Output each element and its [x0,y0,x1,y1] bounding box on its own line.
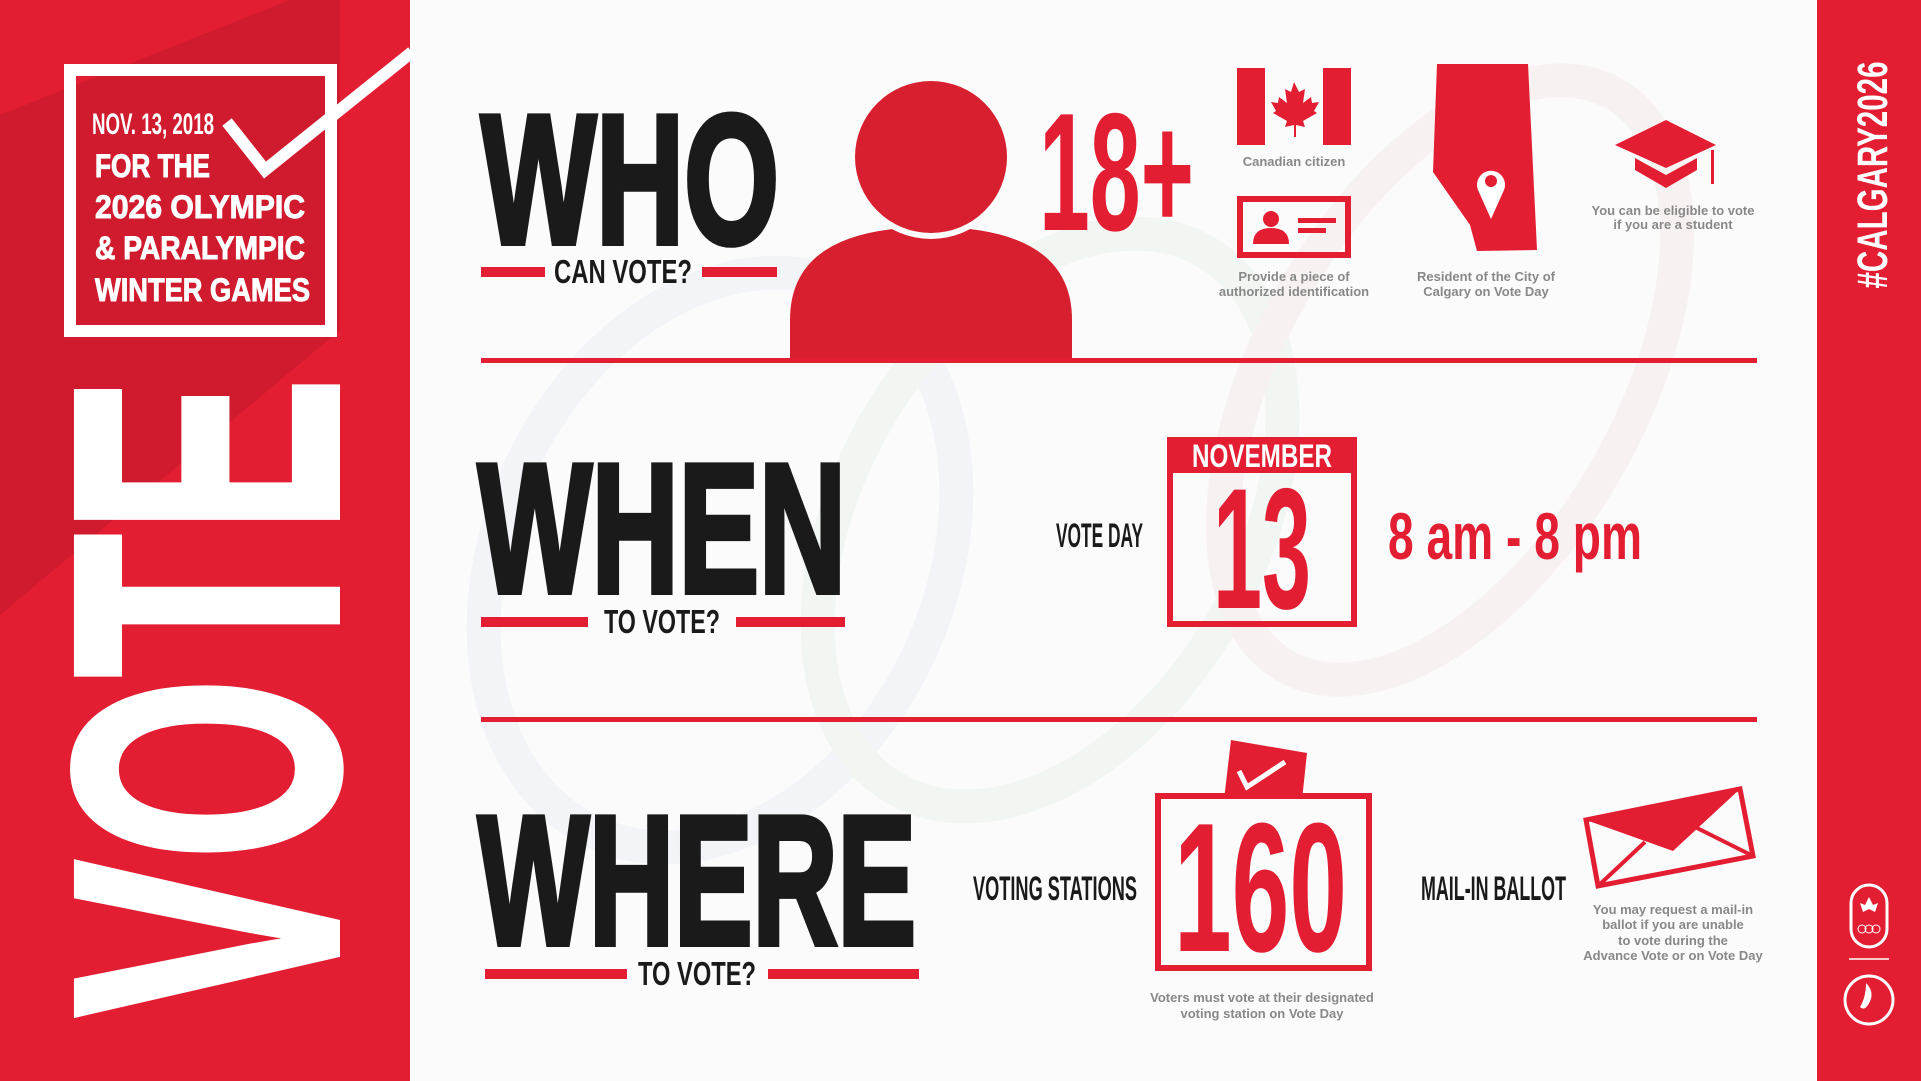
heading: WHERE: WHERE [478,777,916,983]
icon: graduation cap [1591,120,1755,232]
icon: graduation cap: if you are a student [1613,217,1733,232]
label: vote day: VOTE DAY [1056,517,1143,555]
panel: right red strip [1817,0,1921,1081]
icon: calendar [1167,437,1357,645]
icon: calendar: 13 [1213,453,1311,645]
icon: ID card: authorized identification [1219,284,1369,299]
checkmark [227,52,412,170]
icon: Alberta map with pin [1417,64,1556,299]
heading: WHO [481,76,779,290]
icon: paralympic logo [1845,976,1893,1024]
date box: NOV. 13, 2018 [92,108,214,141]
heading: WHO: CAN VOTE? [554,253,692,290]
mail text: ballot if you are unable [1602,917,1744,932]
icon: ballot box with 160: voting station on Vote Day [1180,1006,1344,1021]
icon: ballot box with 160 [1150,740,1374,1021]
date box [70,70,331,331]
heading: WHEN: WHEN [478,425,846,631]
icon: ballot box with 160: 160 [1174,784,1347,990]
icon: graduation cap: You can be eligible to vote [1591,203,1755,218]
icon: ballot box with 160: Voters must vote at their designated [1150,990,1374,1005]
heading: WHERE [478,777,919,992]
date box: 2026 OLYMPIC [95,189,305,225]
heading: WHERE: TO VOTE? [638,955,756,992]
date box: WINTER GAMES [95,272,310,308]
VOTE vertical text: VOTE [0,377,418,1017]
heading: WHEN: TO VOTE? [604,603,720,640]
icon: Alberta map with pin: Calgary on Vote Day [1423,284,1549,299]
heading: WHO: WHO [481,76,779,282]
time: 8 am - 8 pm [1388,499,1642,573]
heading: WHEN [478,425,846,640]
icon: olympic logo [1851,885,1887,947]
label: mail-in ballot: MAIL-IN BALLOT [1421,870,1566,908]
date box: FOR THE [95,148,210,184]
panel: left red VOTE panel [0,0,418,1081]
icon: ID card [1219,199,1369,299]
icon: canadian flag [1237,68,1351,169]
mail text [1583,902,1763,963]
mail text: to vote during the [1618,933,1728,948]
icon: calendar: NOVEMBER [1192,438,1332,474]
icon: envelope [1586,789,1753,886]
label: voting stations: VOTING STATIONS [973,870,1137,908]
date box: & PARALYMPIC [95,230,305,266]
icon: ID card: Provide a piece of [1238,269,1350,284]
icon: person [790,75,1072,361]
icon: Alberta map with pin: Resident of the City of [1417,269,1556,284]
mail text: Advance Vote or on Vote Day [1583,948,1763,963]
mail text: You may request a mail-in [1593,902,1753,917]
icon: canadian flag: Canadian citizen [1243,154,1345,169]
age 18+: 18+ [1039,78,1194,266]
